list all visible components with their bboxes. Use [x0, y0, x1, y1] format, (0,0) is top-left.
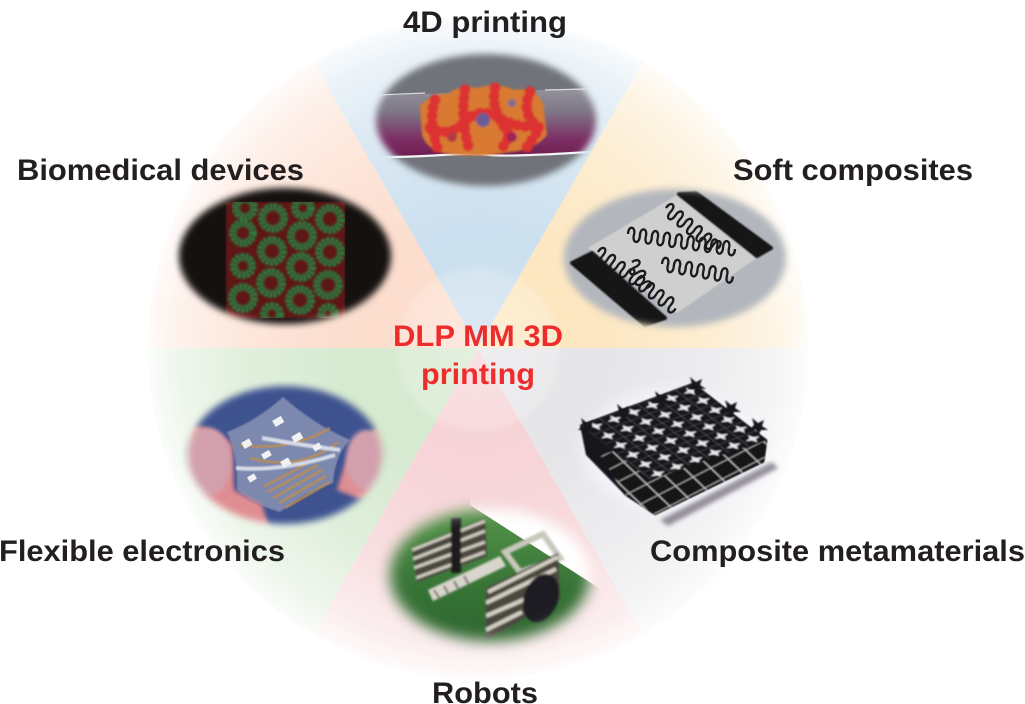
sector: composite metamaterials [478, 348, 808, 634]
central title: DLP MM 3D printing: DLP MM 3D [393, 320, 563, 353]
sector: 4D printing [313, 18, 643, 348]
wheel of six coloured sectors [144, 14, 812, 682]
image: composite metamaterial star lattice [578, 377, 778, 526]
central title: DLP MM 3D printing [393, 320, 563, 391]
label: Composite metamaterials: Composite metamaterials [650, 535, 1025, 568]
sector: biomedical devices [148, 62, 478, 348]
label: Soft composites: Soft composites [733, 154, 973, 187]
image: 4D printing stent in tube [368, 48, 608, 193]
sector: soft composites [478, 62, 808, 348]
image: flexible electronics held by fingers [180, 380, 390, 530]
sector: robots [313, 348, 643, 678]
sector: flexible electronics [148, 348, 478, 634]
label: Flexible electronics: Flexible electronics [0, 535, 285, 568]
image: soft composite serpentine sheet [555, 180, 795, 335]
label: Biomedical devices: Biomedical devices [17, 154, 304, 187]
image: biomedical device fluorescent pattern [170, 180, 400, 330]
image: printed robot on green mat [375, 495, 605, 655]
label: 4D printing: 4D printing [403, 6, 567, 39]
central title: DLP MM 3D printing: printing [421, 358, 535, 391]
